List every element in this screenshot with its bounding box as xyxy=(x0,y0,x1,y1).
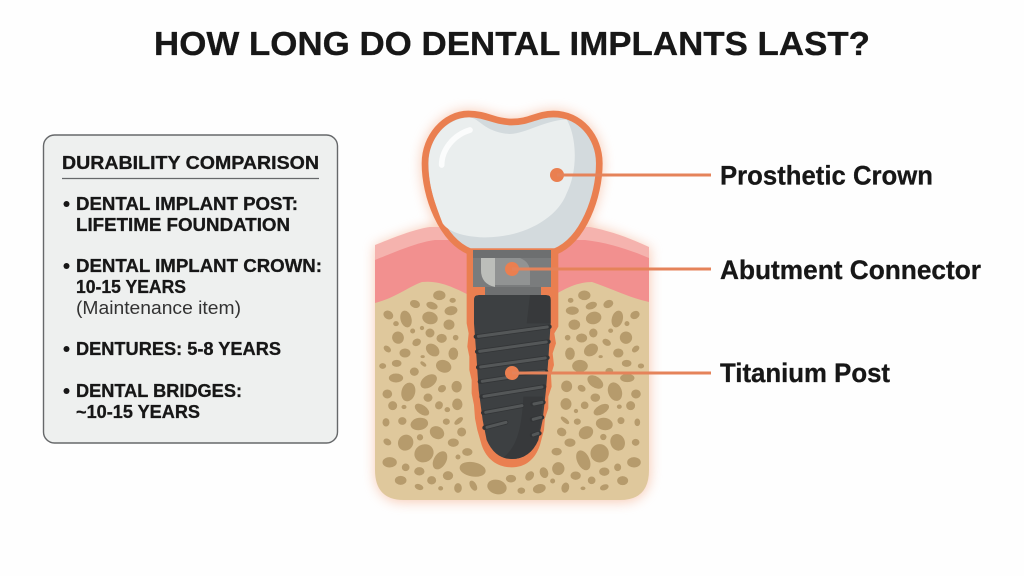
list item: dental implant crown xyxy=(64,256,322,318)
list item: dental implant post: LIFETIME FOUNDATION xyxy=(76,215,290,235)
abutment connector xyxy=(467,250,558,296)
list item: dental implant post xyxy=(64,194,298,235)
list item: dentures: DENTURES: 5-8 YEARS xyxy=(76,339,281,359)
callout: titanium post xyxy=(505,358,890,388)
list item: dental implant crown: 10-15 YEARS xyxy=(76,277,186,297)
callout: abutment connector: Abutment Connector xyxy=(720,255,981,285)
crown highlight xyxy=(429,117,575,237)
callout: prosthetic crown xyxy=(550,160,933,190)
list item: dental implant crown: (Maintenance item) xyxy=(76,298,241,318)
list item: dental bridges xyxy=(64,381,242,422)
crown shine xyxy=(442,130,470,165)
list item: dental implant post: DENTAL IMPLANT POST: xyxy=(76,194,298,214)
callout: titanium post: Titanium Post xyxy=(720,358,890,388)
gum tissue xyxy=(375,227,649,320)
titanium post xyxy=(474,295,551,459)
callout: abutment connector xyxy=(505,255,981,285)
implant diagram xyxy=(375,114,650,502)
orange outline around post xyxy=(467,248,558,467)
panel: durability comparison xyxy=(44,135,338,443)
title: HOW LONG DO DENTAL IMPLANTS LAST? xyxy=(154,25,870,62)
screw threads xyxy=(476,327,549,435)
orange glow behind diagram xyxy=(375,114,650,502)
list item: dental bridges: ~10-15 YEARS xyxy=(76,402,200,422)
panel heading: DURABILITY COMPARISON xyxy=(62,152,319,173)
prosthetic crown xyxy=(425,114,599,252)
callout: prosthetic crown: Prosthetic Crown xyxy=(720,160,933,190)
list item: dental bridges: DENTAL BRIDGES: xyxy=(76,381,242,401)
list item: dental implant crown: DENTAL IMPLANT CROWN: xyxy=(76,256,322,276)
bone with pores xyxy=(375,282,649,500)
